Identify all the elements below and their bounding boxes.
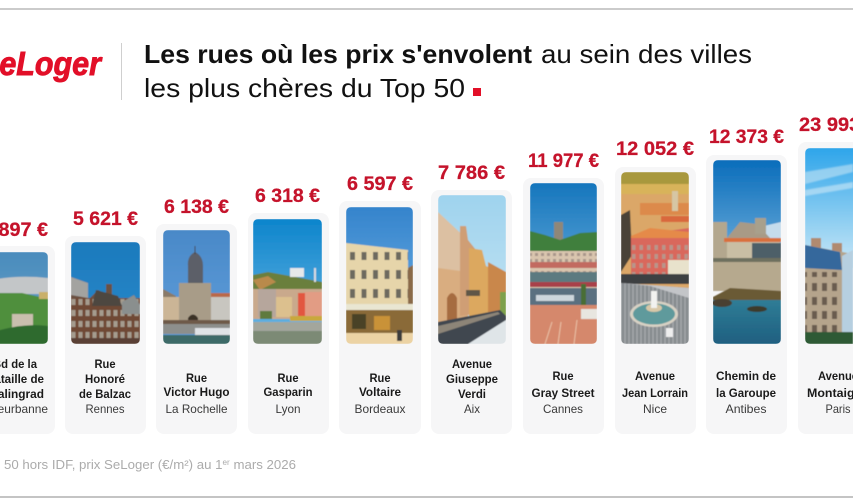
price: Nice: 12 052 €	[616, 139, 694, 160]
street: Antibes: la Garoupe	[716, 386, 776, 400]
street: Paris	[807, 369, 853, 416]
street: Aix	[446, 357, 498, 416]
street: Aix: Verdi	[458, 387, 486, 401]
column: Rennes	[65, 209, 146, 434]
price: Cannes: 11 977 €	[528, 151, 599, 172]
photo: Lyon	[253, 219, 322, 344]
column: Lyon	[248, 186, 329, 434]
street: Aix: Aix	[464, 402, 480, 416]
price: Aix: 7 786 €	[438, 163, 505, 184]
street: Rennes	[79, 357, 131, 416]
top rule	[0, 8, 853, 10]
street: La Rochelle	[164, 371, 230, 416]
footnote: mars 2026	[230, 457, 296, 472]
street: Rennes: Rue	[94, 357, 116, 371]
column: Nice	[615, 139, 696, 434]
price: Antibes: 12 373 €	[709, 127, 784, 148]
bottom rule	[0, 496, 853, 498]
photo: Rennes	[71, 242, 140, 344]
column: Bordeaux	[339, 174, 421, 434]
street: Cannes: Rue	[552, 369, 574, 383]
logo divider	[121, 43, 122, 100]
photo: Paris	[805, 148, 853, 344]
street: Lyon: Lyon	[276, 402, 300, 416]
street: Nice: Avenue	[635, 369, 675, 383]
photo: La Rochelle	[163, 230, 230, 344]
street: La Rochelle: La Rochelle	[166, 402, 228, 416]
title: les plus chères du Top 50	[144, 73, 465, 103]
photo: Aix	[438, 195, 506, 344]
photo: Bordeaux	[346, 207, 413, 344]
street: La Rochelle: Rue	[186, 371, 207, 385]
street: Rennes: Rennes	[86, 402, 124, 416]
price: Lyon: 6 318 €	[255, 186, 320, 207]
street: Bordeaux: Bordeaux	[354, 402, 406, 416]
column: Paris	[798, 115, 853, 434]
street: Nice	[622, 369, 688, 416]
street: Nice: Nice	[643, 402, 667, 416]
street: Bordeaux	[354, 371, 406, 416]
street: Aix: Avenue	[452, 357, 492, 371]
footnote: er	[223, 458, 230, 467]
photo: Cannes	[530, 183, 597, 344]
street: La Rochelle: Victor Hugo	[164, 385, 230, 399]
photo: Nice	[621, 172, 689, 344]
street: Bordeaux: Rue	[370, 371, 391, 385]
photo: Villeurbanne	[0, 252, 48, 344]
street: Villeurbanne	[0, 357, 48, 416]
photo: Antibes	[712, 160, 781, 344]
street: Lyon: Gasparin	[264, 385, 312, 399]
price: Bordeaux: 6 597 €	[347, 174, 413, 195]
street: Rennes: Honoré	[85, 372, 125, 386]
street: Lyon: Rue	[278, 371, 299, 385]
price: Rennes: 5 621 €	[73, 209, 138, 230]
street: Antibes	[716, 369, 776, 416]
street: Antibes: Chemin de	[716, 369, 776, 383]
street: Bordeaux: Voltaire	[359, 385, 401, 399]
street: Aix: Giuseppe	[446, 372, 498, 386]
column: Cannes	[523, 151, 604, 434]
street: Cannes	[532, 369, 594, 416]
street: Nice: Jean Lorrain	[622, 386, 688, 400]
street: Paris: Paris	[826, 402, 850, 416]
street: Cannes: Cannes	[543, 402, 583, 416]
column: La Rochelle	[156, 197, 237, 434]
street: Cannes: Gray Street	[532, 386, 594, 400]
title: au sein des villes	[541, 39, 752, 69]
column: Villeurbanne	[0, 220, 55, 434]
street: Lyon	[264, 371, 312, 416]
title	[144, 39, 752, 103]
column: Antibes	[706, 127, 787, 434]
street: Antibes: Antibes	[726, 402, 766, 416]
street: Rennes: de Balzac	[79, 387, 131, 401]
title: Les rues où les prix s'envolent	[144, 39, 532, 69]
column: Aix	[431, 163, 512, 434]
price: La Rochelle: 6 138 €	[164, 197, 229, 218]
